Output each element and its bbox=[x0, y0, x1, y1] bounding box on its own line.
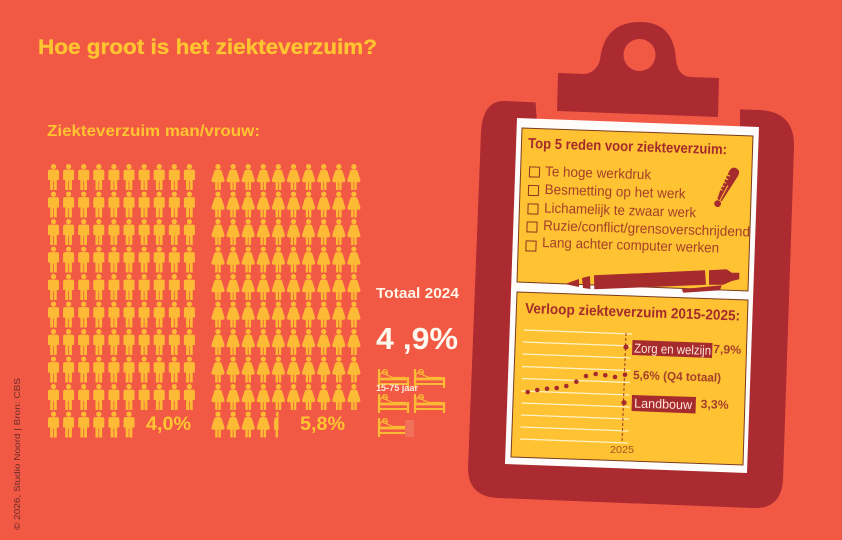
label: landbouw: 3,3% bbox=[700, 397, 729, 412]
panel: trend chart bbox=[511, 292, 748, 465]
paper bbox=[505, 118, 759, 473]
data points bbox=[525, 344, 629, 405]
list of reasons: Besmetting op het werk bbox=[544, 181, 687, 201]
clipboard bbox=[468, 22, 794, 508]
heading: totaal 2024: Totaal 2024 bbox=[376, 285, 460, 302]
value: women: 5,8% bbox=[300, 414, 345, 435]
list of reasons: Te hoge werkdruk bbox=[545, 163, 652, 182]
clipboard board bbox=[468, 101, 794, 508]
value: men: 4,0% bbox=[146, 414, 191, 435]
line chart bbox=[520, 330, 742, 456]
2025 marker line bbox=[622, 333, 626, 443]
heading: Verloop ziekteverzuim 2015-2025: bbox=[525, 301, 740, 325]
icons: beds bbox=[379, 369, 444, 437]
credit: © 2026, Studio Noord | Bron: CBS bbox=[12, 378, 22, 530]
label: totaal: 5,6% (Q4 totaal) bbox=[633, 368, 721, 385]
label: age range: 15-75 jaar bbox=[376, 383, 418, 393]
clipboard clip bbox=[557, 22, 719, 117]
subheading: man/vrouw: Ziekteverzuim man/vrouw: bbox=[47, 123, 260, 140]
pictogram: men 4,0% bbox=[48, 164, 195, 438]
list of reasons: Lichamelijk te zwaar werk bbox=[544, 200, 697, 220]
value: totaal: 4 ,9% bbox=[376, 321, 458, 356]
label: landbouw bbox=[632, 395, 729, 414]
panel: top 5 reasons bbox=[517, 128, 753, 293]
title: Hoe groot is het ziekteverzuim? bbox=[38, 36, 377, 59]
axis label: 2025 bbox=[610, 445, 634, 456]
label: zorg en welzijn: Zorg en welzijn bbox=[634, 341, 711, 358]
gap between board and clip bbox=[535, 95, 740, 128]
icon: pen bbox=[565, 269, 739, 293]
label: landbouw: Landbouw bbox=[634, 396, 693, 412]
grid lines bbox=[520, 330, 632, 443]
list of reasons bbox=[526, 163, 750, 256]
list of reasons: Ruzie/conflict/grensoverschrijdend bbox=[543, 217, 750, 240]
pictogram: women 5,8% bbox=[211, 164, 360, 438]
heading: Top 5 reden voor ziekteverzuim: bbox=[528, 136, 727, 158]
list of reasons: Lang achter computer werken bbox=[542, 234, 719, 256]
icon: thermometer bbox=[711, 166, 741, 209]
clip hole bbox=[624, 39, 656, 71]
label: zorg en welzijn: 7,9% bbox=[713, 342, 742, 357]
